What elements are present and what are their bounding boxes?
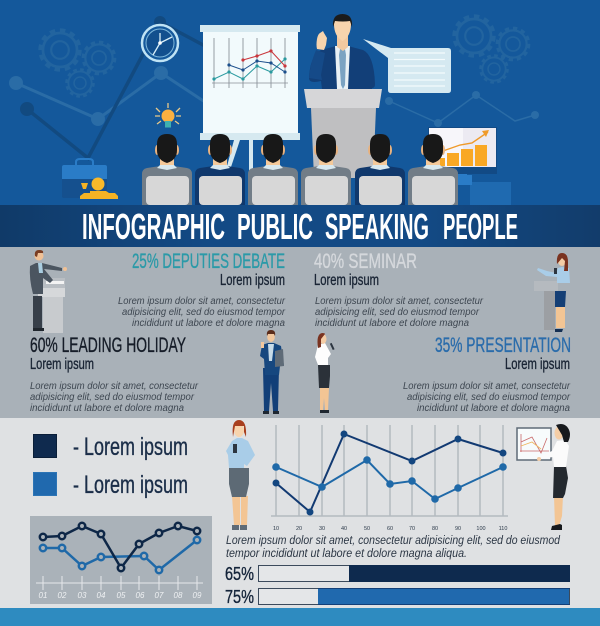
small line chart: 08	[174, 591, 183, 600]
title: PUBLIC	[237, 206, 313, 247]
figure: woman with microphone	[315, 333, 335, 413]
legend: - Lorem ipsum	[73, 471, 188, 499]
figure: presenter with chart board	[517, 424, 570, 530]
figure: man at podium	[30, 250, 67, 333]
monitor with bar chart	[428, 127, 511, 205]
title: INFOGRAPHIC	[82, 206, 225, 247]
main line chart: 110	[499, 526, 507, 532]
small line chart: 06	[136, 591, 145, 600]
title: PEOPLE	[443, 206, 518, 247]
monitor bars	[439, 145, 487, 166]
text block: Lorem ipsum dolor sit amet, consectetur	[30, 381, 199, 392]
text block: Lorem ipsum dolor sit amet, consectetur	[403, 381, 571, 392]
paragraph under chart: Lorem ipsum dolor sit amet, consectetur adipisicing elit, sed do eiusmod	[226, 535, 561, 547]
progress bar: 65%: 65%	[225, 563, 254, 584]
paragraph under chart: tempor incididunt ut labore et dolore magna aliqua.	[226, 548, 467, 560]
main line chart: 30	[319, 526, 325, 532]
main line chart: 100	[476, 526, 486, 532]
main line chart: 60	[387, 526, 393, 532]
small line chart: 09	[193, 591, 202, 600]
subheading: Lorem ipsum	[314, 272, 379, 289]
podium	[304, 89, 382, 178]
main line chart: 90	[455, 526, 461, 532]
main line chart	[271, 425, 508, 532]
text block: adipisicing elit, sed do eiusmod tempor	[122, 307, 286, 318]
main line chart: 10	[273, 526, 279, 532]
line chart on flip chart	[212, 38, 288, 88]
progress bar: 65%	[225, 563, 570, 584]
legend: - Lorem ipsum	[73, 433, 188, 461]
text block: adipisicing elit, sed do eiusmod tempor	[407, 392, 571, 403]
text block: incididunt ut labore et dolore magna	[417, 403, 570, 414]
title band	[0, 205, 600, 247]
background line graphs	[9, 16, 539, 158]
small line chart: 01	[39, 591, 47, 600]
title	[82, 206, 518, 247]
heading: 25% deputies debate: 25% DEPUTIES DEBATE	[132, 250, 285, 273]
icon: clock	[142, 25, 178, 61]
background gears right	[454, 16, 529, 83]
progress bar: 75%	[225, 586, 570, 607]
small line chart: 02	[58, 591, 67, 600]
main line chart: 80	[432, 526, 438, 532]
figure: woman with phone	[226, 420, 255, 530]
main line chart: 70	[409, 526, 415, 532]
heading: 40% seminar: 40% SEMINAR	[314, 250, 417, 273]
small line chart: 03	[78, 591, 87, 600]
figure: man with clipboard	[260, 330, 284, 414]
text block: incididunt ut labore et dolore magna	[132, 318, 285, 329]
background gears left	[40, 30, 115, 97]
header background	[0, 0, 600, 206]
flip chart	[200, 25, 300, 171]
grey middle panel	[0, 247, 600, 418]
footer band	[0, 608, 600, 626]
main line chart: 40	[341, 526, 347, 532]
small line chart	[30, 516, 212, 604]
text block: incididunt ut labore et dolore magna	[30, 403, 184, 414]
text block: Lorem ipsum dolor sit amet, consectetur	[118, 296, 286, 307]
subheading: Lorem ipsum	[220, 272, 285, 289]
audience	[142, 134, 458, 205]
progress bar: 75%: 75%	[225, 586, 254, 607]
subheading: Lorem ipsum	[30, 356, 94, 373]
title: SPEAKING	[325, 206, 429, 247]
small line chart: 04	[97, 591, 106, 600]
heading: 60% leading holiday: 60% LEADING HOLIDAY	[30, 334, 186, 357]
text block: adipisicing elit, sed do eiusmod tempor	[315, 307, 480, 318]
subheading: Lorem ipsum	[505, 356, 570, 373]
text block: adipisicing elit, sed do eiusmod tempor	[30, 392, 195, 403]
figure: woman at podium	[534, 253, 570, 332]
light lower panel	[0, 418, 600, 608]
main line chart: 50	[364, 526, 370, 532]
icon: briefcase with coins	[62, 159, 118, 199]
speech bubble	[363, 39, 451, 93]
legend	[34, 433, 188, 499]
small line chart: 07	[155, 591, 164, 600]
speaker	[309, 14, 375, 89]
text block: Lorem ipsum dolor sit amet, consectetur	[315, 296, 484, 307]
main line chart: 20	[296, 526, 302, 532]
text block: incididunt ut labore et dolore magna	[315, 318, 469, 329]
icon: light bulb	[155, 103, 181, 128]
small line chart: 05	[117, 591, 126, 600]
